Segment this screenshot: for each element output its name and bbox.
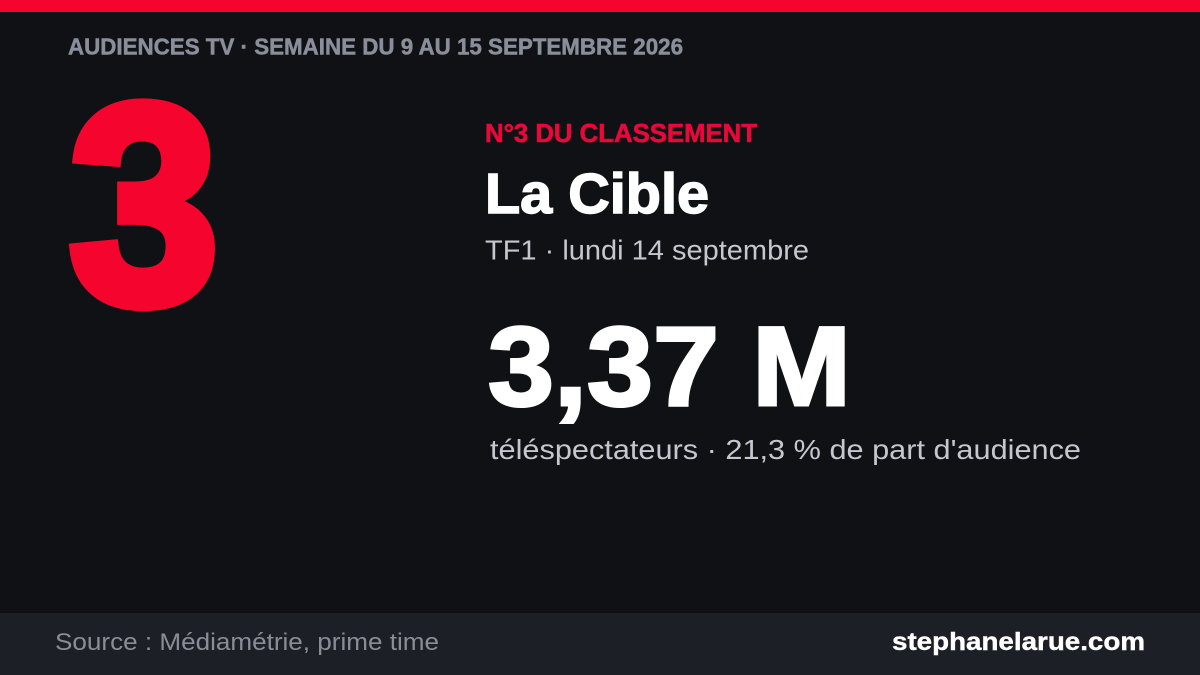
source note: Source : Médiamétrie, prime time	[55, 629, 439, 656]
website: stephanelarue.com	[892, 628, 1145, 656]
audience details: téléspectateurs · 21,3 % de part d'audience	[490, 434, 1081, 465]
audience figure: 3,37 M	[488, 304, 851, 429]
panel: programme details	[485, 118, 1081, 465]
footer band	[0, 613, 1200, 675]
rank label: N°3 DU CLASSEMENT	[485, 118, 757, 148]
big rank number: 3	[69, 46, 219, 362]
programme title: La Cible	[485, 162, 709, 226]
channel and date: TF1 · lundi 14 septembre	[485, 234, 809, 266]
top red bar	[0, 0, 1200, 12]
header label: AUDIENCES TV · SEMAINE DU 9 AU 15 SEPTEMBRE 2026	[68, 34, 683, 60]
